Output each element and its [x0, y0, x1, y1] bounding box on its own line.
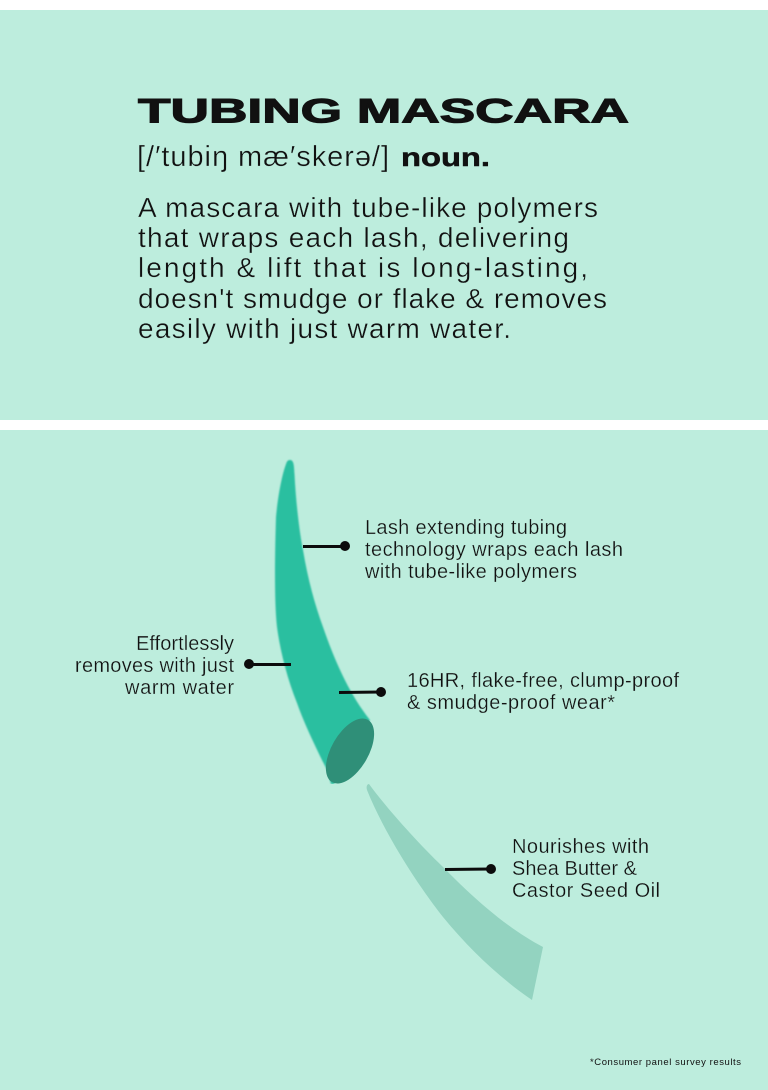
callout: tubing technology: with tube-like polymers — [364, 561, 577, 583]
callout: nourishing oils — [445, 836, 660, 902]
callout: nourishing oils: Castor Seed Oil — [512, 880, 660, 902]
pronunciation: noun. — [401, 142, 490, 172]
definition text: A mascara with tube-like polymers — [138, 192, 598, 223]
panel: lash diagram — [0, 430, 768, 1090]
callout: tubing technology: Lash extending tubing — [365, 517, 567, 539]
callout: warm water removal: removes with just — [75, 655, 234, 677]
callout: warm water removal: Effortlessly — [136, 633, 234, 655]
pronunciation: [/′tubiŋ mæ′skerə/] — [137, 141, 389, 173]
title: TUBING MASCARA — [138, 92, 629, 130]
tube opening — [326, 718, 374, 784]
callout: warm water removal — [75, 633, 291, 699]
illustration: bare lash segment — [367, 784, 543, 1000]
definition text — [138, 192, 607, 344]
callout: 16HR wear: 16HR, flake-free, clump-proof — [407, 670, 679, 692]
callout: tubing technology — [303, 517, 623, 583]
callout: nourishing oils: Nourishes with — [512, 836, 649, 858]
definition text: doesn't smudge or flake & removes — [138, 283, 607, 314]
definition text: that wraps each lash, delivering — [138, 222, 569, 253]
callout: nourishing oils: Shea Butter & — [512, 858, 638, 880]
callout: warm water removal: warm water — [124, 677, 234, 699]
definition text: easily with just warm water. — [138, 313, 511, 344]
callout: 16HR wear: & smudge-proof wear* — [407, 692, 615, 714]
callout: tubing technology: technology wraps each lash — [365, 539, 623, 561]
definition text: length & lift that is long-lasting, — [138, 252, 588, 283]
footnote: *Consumer panel survey results — [590, 1057, 741, 1068]
callout: 16HR wear — [339, 670, 679, 714]
illustration: tubed lash — [275, 460, 384, 791]
panel: definition — [0, 10, 768, 420]
